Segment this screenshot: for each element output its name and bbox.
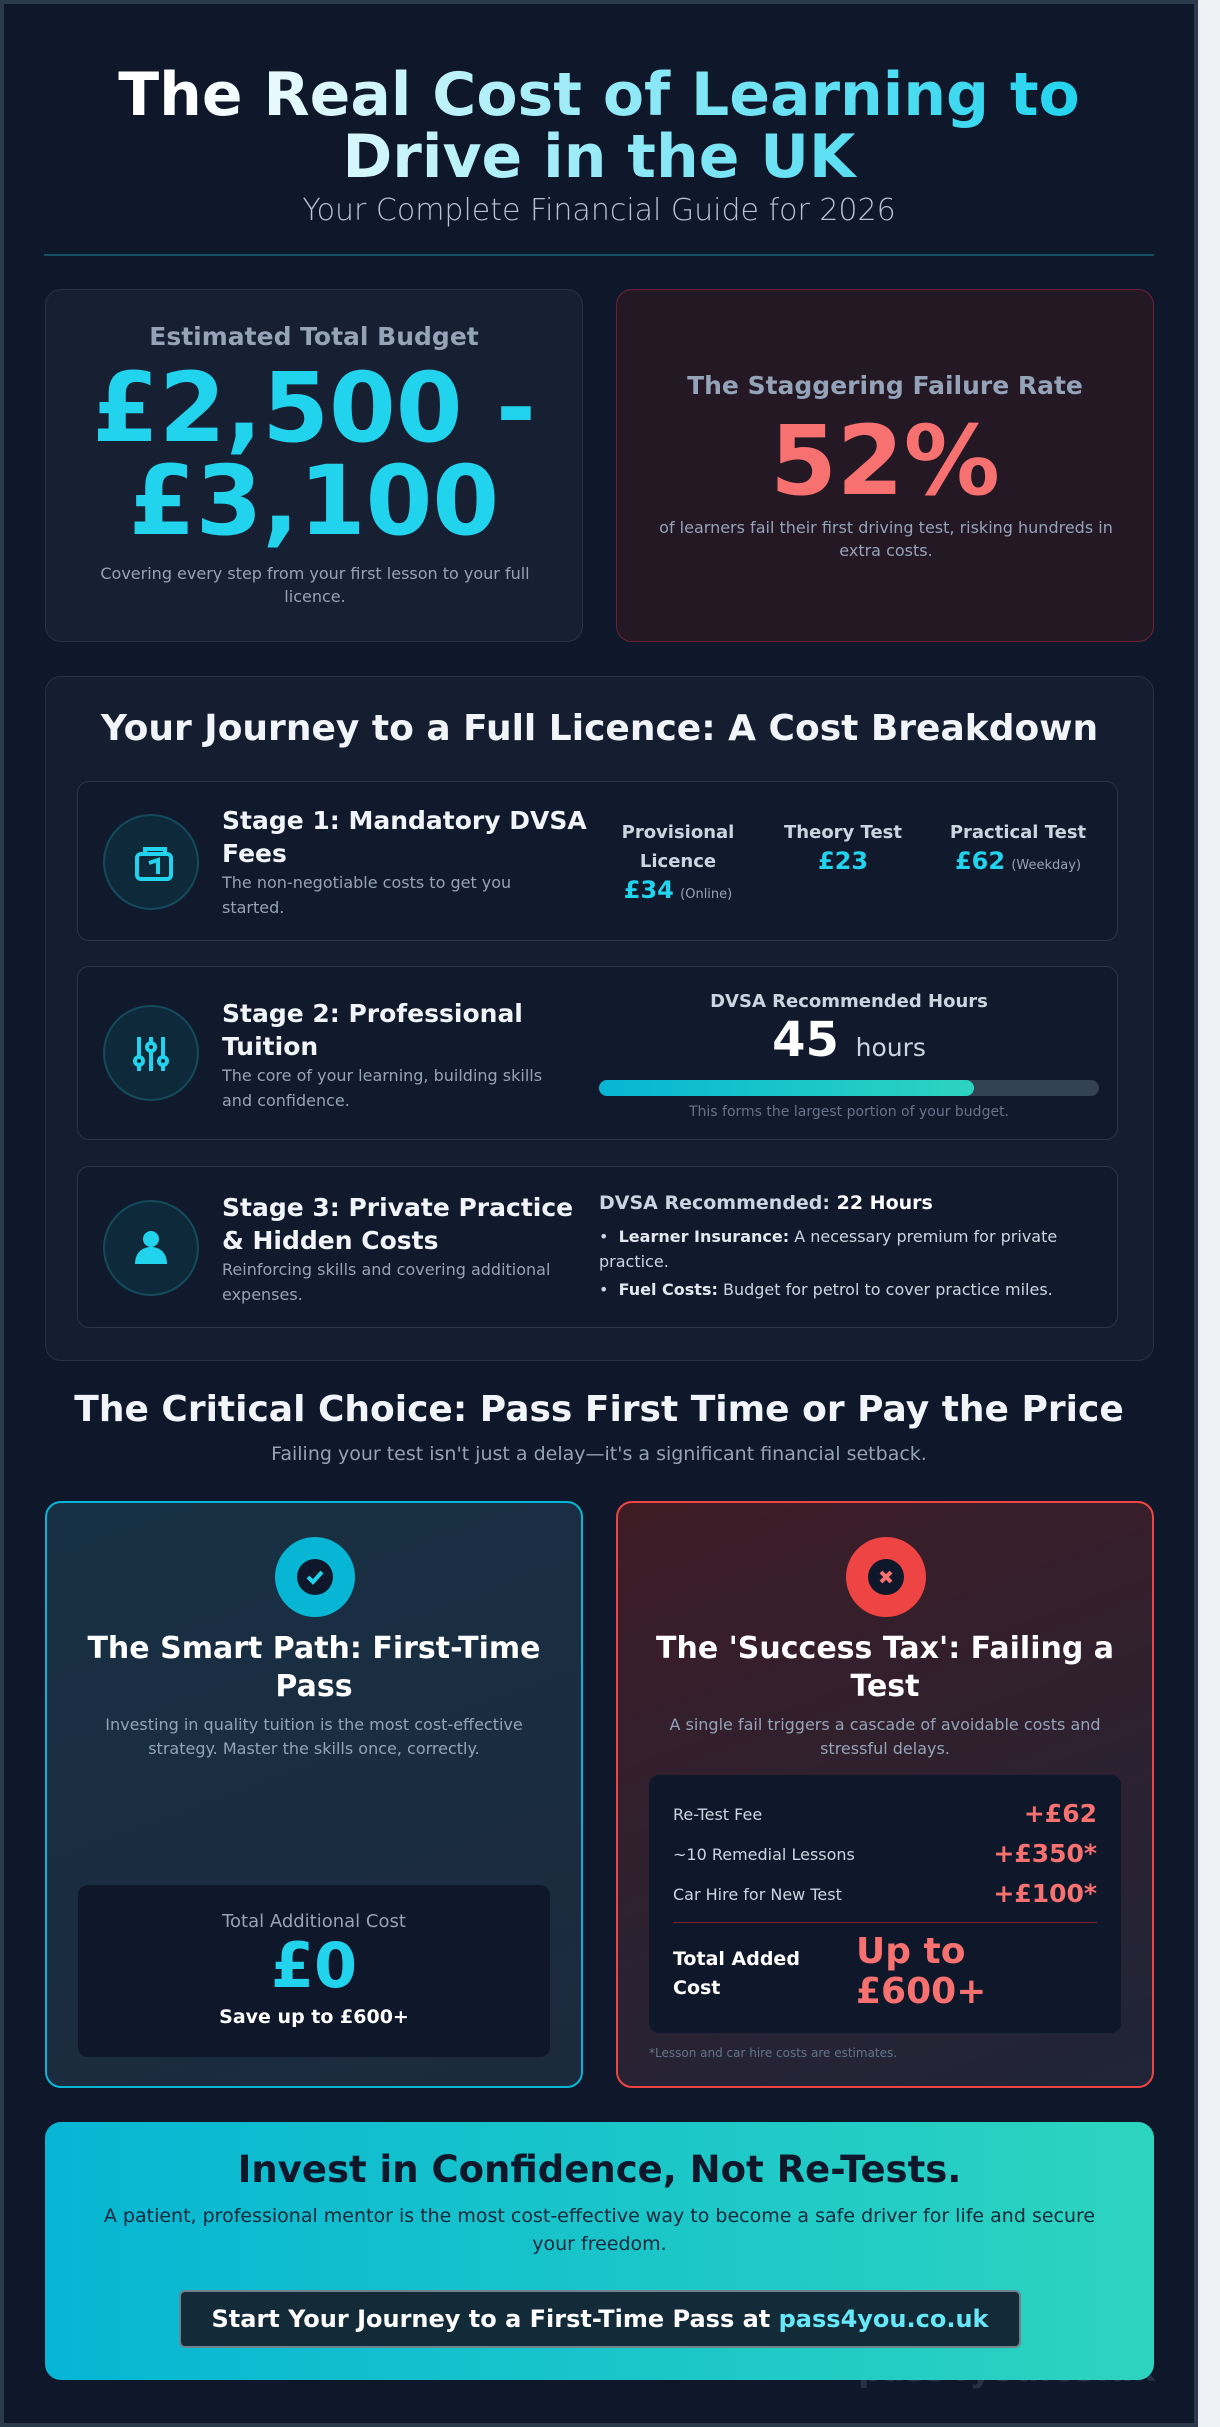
icon: person bbox=[103, 1200, 199, 1296]
extra costs table: Cost bbox=[673, 1977, 720, 1999]
cta panel bbox=[45, 2122, 1154, 2380]
budget caption: Covering every step from your first lesson to your full licence. bbox=[100, 564, 530, 606]
stage 2 text bbox=[222, 999, 542, 1110]
subtitle: Your Complete Financial Guide for 2026 bbox=[302, 193, 896, 228]
extra costs table: +£62 bbox=[1024, 1799, 1097, 1828]
failure caption: of learners fail their first driving test, risking hundreds in extra costs. bbox=[659, 518, 1113, 560]
provisional licence fee: Licence bbox=[640, 851, 716, 872]
extra costs table: +£100* bbox=[993, 1879, 1097, 1908]
panel: success tax bbox=[616, 1501, 1154, 2088]
stage 1 bbox=[77, 781, 1118, 941]
watermark: pass4you.co.uk bbox=[858, 2350, 1155, 2390]
theory test fee: £23 bbox=[818, 847, 868, 875]
cta button bbox=[179, 2290, 1021, 2348]
icon: check bbox=[275, 1537, 355, 1617]
provisional licence fee: £34 (Online) bbox=[624, 876, 732, 904]
icon: sliders bbox=[103, 1005, 199, 1101]
stage 1 text: The non-negotiable costs to get you started. bbox=[222, 873, 511, 917]
extra costs table: Car Hire for New Test bbox=[673, 1885, 842, 1904]
extra costs table: Total Added bbox=[673, 1948, 800, 1970]
cta text: A patient, professional mentor is the most cost-effective way to become a safe driver for life and secure your freedom. bbox=[104, 2205, 1095, 2255]
provisional licence fee bbox=[622, 822, 734, 904]
panel: failure rate bbox=[616, 289, 1154, 642]
hidden costs list: • Fuel Costs: Budget for petrol to cover practice miles. bbox=[599, 1280, 1053, 1299]
critical choice heading: The Critical Choice: Pass First Time or Pay the Price bbox=[74, 1389, 1124, 1430]
panel: journey cost breakdown bbox=[45, 676, 1154, 1361]
title: Drive in the UK bbox=[342, 122, 856, 192]
extra costs table bbox=[649, 1775, 1121, 2033]
provisional licence fee: Provisional bbox=[622, 822, 734, 843]
zero cost box bbox=[78, 1885, 550, 2057]
hours chart bbox=[599, 991, 1099, 1120]
budget heading: Estimated Total Budget bbox=[149, 322, 479, 351]
stage 3 text: Stage 3: Private Practice & Hidden Costs bbox=[222, 1193, 573, 1255]
stage 1 text bbox=[222, 806, 587, 917]
stage 3 text: Reinforcing skills and covering additional expenses. bbox=[222, 1260, 550, 1304]
panel: estimated budget bbox=[45, 289, 583, 642]
cta heading: Invest in Confidence, Not Re-Tests. bbox=[238, 2148, 961, 2191]
extra costs table: Up to bbox=[856, 1931, 965, 1972]
hours chart: DVSA Recommended Hours bbox=[710, 991, 988, 1012]
hours chart: 45 hours bbox=[772, 1012, 926, 1068]
smart path heading: The Smart Path: First-Time Pass bbox=[87, 1631, 541, 1704]
hidden costs list: • Learner Insurance: A necessary premium for private practice. bbox=[599, 1227, 1057, 1271]
title bbox=[0, 64, 1198, 188]
zero cost box: Save up to £600+ bbox=[219, 2006, 409, 2028]
zero cost box: £0 bbox=[271, 1929, 357, 2002]
stage 1 text: Stage 1: Mandatory DVSA Fees bbox=[222, 806, 587, 868]
success tax heading: The 'Success Tax': Failing a Test bbox=[656, 1631, 1114, 1704]
extra costs table: +£350* bbox=[993, 1839, 1097, 1868]
hidden costs list: DVSA Recommended: 22 Hours bbox=[599, 1192, 933, 1214]
practical test fee: £62 (Weekday) bbox=[955, 847, 1081, 875]
success tax text: A single fail triggers a cascade of avoidable costs and stressful delays. bbox=[669, 1715, 1101, 1758]
title: The Real Cost of Learning to bbox=[118, 60, 1080, 130]
hours chart: This forms the largest portion of your budget. bbox=[689, 1104, 1009, 1120]
stage 3 bbox=[77, 1166, 1118, 1328]
cta button: Start Your Journey to a First-Time Pass at pass4you.co.uk bbox=[212, 2305, 988, 2333]
zero cost box: Total Additional Cost bbox=[222, 1911, 406, 1932]
critical choice subtitle: Failing your test isn't just a delay—it's a significant financial setback. bbox=[271, 1443, 927, 1465]
extra costs table: Re-Test Fee bbox=[673, 1805, 762, 1824]
practical test fee bbox=[950, 822, 1086, 875]
fees list bbox=[622, 822, 1086, 904]
budget value: £3,100 bbox=[129, 445, 499, 557]
hidden costs list bbox=[599, 1192, 1057, 1299]
theory test fee: Theory Test bbox=[784, 822, 902, 843]
theory test fee bbox=[784, 822, 902, 875]
stage 2 text: Stage 2: Professional Tuition bbox=[222, 999, 523, 1061]
stage 2 text: The core of your learning, building skills and confidence. bbox=[222, 1066, 542, 1110]
journey heading: Your Journey to a Full Licence: A Cost Breakdown bbox=[101, 708, 1098, 749]
panel: smart path bbox=[45, 1501, 583, 2088]
extra costs table: £600+ bbox=[856, 1971, 986, 2012]
stage 3 text bbox=[222, 1193, 573, 1304]
progress bar bbox=[599, 1080, 1099, 1096]
icon: cross bbox=[846, 1537, 926, 1617]
icon: id card bbox=[103, 814, 199, 910]
52% stat: 52% bbox=[770, 405, 1000, 517]
budget value bbox=[92, 352, 536, 557]
stage 2 bbox=[77, 966, 1118, 1140]
footnote: *Lesson and car hire costs are estimates. bbox=[649, 2046, 897, 2060]
budget value: £2,500 - bbox=[92, 352, 536, 464]
practical test fee: Practical Test bbox=[950, 822, 1086, 843]
smart path text: Investing in quality tuition is the most cost-effective strategy. Master the skills once, correctly. bbox=[105, 1715, 523, 1758]
extra costs table: ~10 Remedial Lessons bbox=[673, 1845, 855, 1864]
failure heading: The Staggering Failure Rate bbox=[687, 371, 1083, 400]
